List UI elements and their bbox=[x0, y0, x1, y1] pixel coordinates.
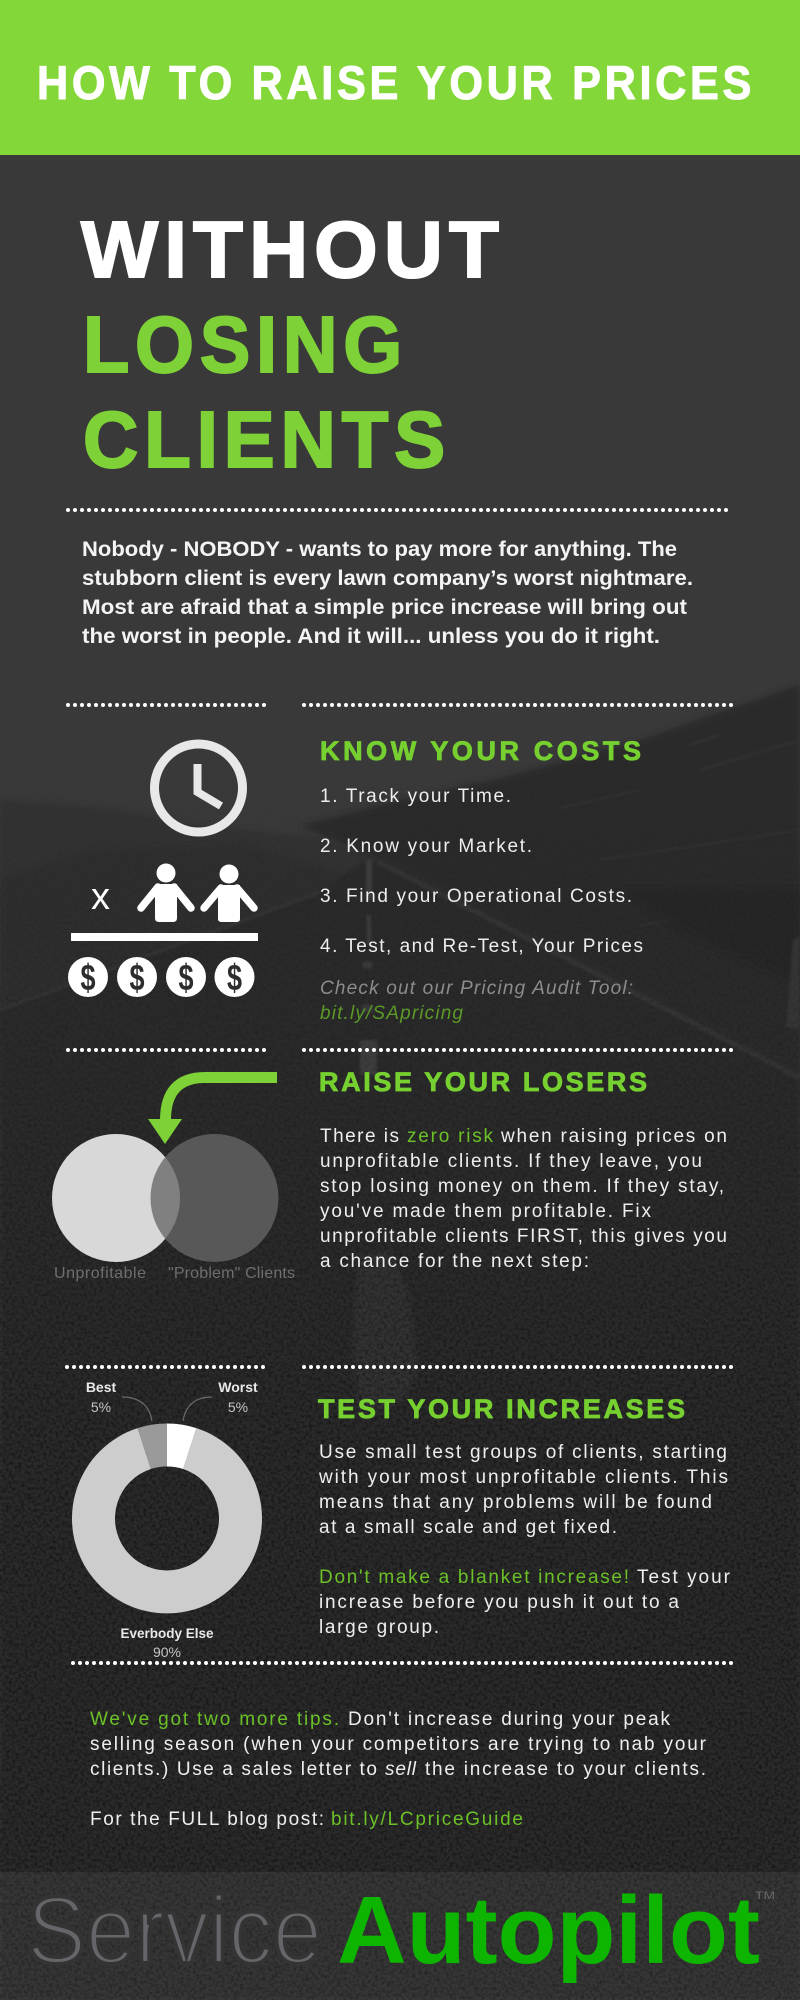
venn diagram bbox=[52, 1134, 295, 1282]
body text: Use small test groups of clients, starting bbox=[319, 1442, 727, 1463]
main title: LOSING bbox=[83, 300, 408, 389]
donut labels: Worst bbox=[218, 1379, 258, 1395]
body text: Test your bbox=[637, 1567, 731, 1588]
body text: a chance for the next step: bbox=[320, 1251, 589, 1272]
donut slice: everybody else bbox=[72, 1428, 262, 1613]
body text: when raising prices on bbox=[500, 1126, 727, 1147]
icon: dollar coins: $ bbox=[227, 957, 242, 998]
icon: clock bbox=[154, 744, 242, 832]
closing tips text: We've got two more tips. bbox=[90, 1709, 339, 1730]
main title: WITHOUT bbox=[81, 205, 505, 294]
closing tips text: For the FULL blog post: bbox=[90, 1809, 324, 1830]
donut labels: Everbody Else bbox=[120, 1626, 214, 1641]
icon: dollar coins: $ bbox=[130, 957, 145, 998]
body text: unprofitable clients FIRST, this gives you bbox=[320, 1226, 727, 1247]
heading: know your costs: KNOW YOUR COSTS bbox=[320, 736, 641, 766]
pricing audit tool link: bit.ly/SApricing bbox=[320, 1003, 463, 1024]
pricing audit tool link bbox=[320, 978, 633, 1024]
background: road photo bbox=[0, 686, 800, 2000]
body text: at a small scale and get fixed. bbox=[319, 1517, 617, 1538]
logo: Service Autopilot bbox=[27, 1877, 775, 1984]
body text bbox=[320, 1126, 727, 1272]
donut labels bbox=[86, 1379, 258, 1660]
intro text bbox=[82, 538, 693, 648]
donut labels: 5% bbox=[228, 1399, 248, 1415]
donut chart bbox=[72, 1379, 262, 1660]
list of steps: 1. Track your Time. bbox=[320, 786, 511, 807]
icon: two people bbox=[141, 864, 254, 922]
donut slice: best bbox=[138, 1423, 167, 1469]
closing tips text: the increase to your clients. bbox=[425, 1759, 706, 1780]
list of steps: 2. Know your Market. bbox=[320, 836, 532, 857]
list of steps: 4. Test, and Re-Test, Your Prices bbox=[320, 936, 643, 957]
header title: HOW TO RAISE YOUR PRICES bbox=[37, 56, 755, 109]
body text: unprofitable clients. If they leave, you bbox=[320, 1151, 702, 1172]
donut labels: 90% bbox=[153, 1644, 181, 1660]
main title bbox=[81, 205, 505, 484]
body text: with your most unprofitable clients. This bbox=[318, 1467, 728, 1488]
intro text: stubborn client is every lawn company’s worst nightmare. bbox=[82, 567, 693, 590]
list of steps bbox=[320, 786, 643, 957]
donut labels: 5% bbox=[91, 1399, 111, 1415]
icon: dollar coins bbox=[68, 957, 254, 998]
panel: know your costs bbox=[320, 736, 643, 1024]
closing tips text: clients.) Use a sales letter to bbox=[90, 1759, 377, 1780]
main title: CLIENTS bbox=[83, 395, 451, 484]
body text: There is bbox=[320, 1126, 399, 1147]
closing tips text bbox=[90, 1709, 707, 1830]
header band bbox=[0, 0, 800, 155]
intro text: the worst in people. And it will... unless you do it right. bbox=[82, 625, 660, 648]
body text bbox=[318, 1442, 731, 1638]
body text: large group. bbox=[319, 1617, 439, 1638]
multiply sign: x bbox=[91, 876, 110, 918]
icon: clock times people equals dollars bbox=[68, 744, 258, 998]
arrow: green curved arrow bbox=[148, 1078, 277, 1144]
heading: test your increases: TEST YOUR INCREASES bbox=[318, 1394, 685, 1424]
donut slice: worst bbox=[167, 1423, 196, 1469]
intro text: Nobody - NOBODY - wants to pay more for anything. The bbox=[82, 538, 677, 561]
list of steps: 3. Find your Operational Costs. bbox=[320, 886, 632, 907]
body text: means that any problems will be found bbox=[319, 1492, 712, 1513]
body text: you've made them profitable. Fix bbox=[320, 1201, 652, 1222]
closing tips text: Don't increase during your peak bbox=[348, 1709, 670, 1730]
body text: stop losing money on them. If they stay, bbox=[320, 1176, 724, 1197]
donut labels: Best bbox=[86, 1379, 117, 1395]
pricing audit tool link: Check out our Pricing Audit Tool: bbox=[320, 978, 633, 999]
icon: dollar coins: $ bbox=[80, 957, 96, 998]
closing tips text: sell bbox=[385, 1759, 417, 1780]
body text: zero risk bbox=[407, 1126, 494, 1147]
logo: Service Autopilot: TM bbox=[755, 1890, 775, 1902]
logo: Service Autopilot: Autopilot bbox=[337, 1877, 760, 1984]
intro text: Most are afraid that a simple price increase will bring out bbox=[82, 596, 687, 619]
body text: Don't make a blanket increase! bbox=[319, 1567, 629, 1588]
venn label: unprofitable: Unprofitable bbox=[54, 1265, 146, 1282]
closing tips text: selling season (when your competitors are trying to nab your bbox=[90, 1734, 707, 1755]
icon: dollar coins: $ bbox=[178, 957, 194, 998]
logo: Service Autopilot: Service bbox=[27, 1877, 322, 1984]
heading: raise your losers: RAISE YOUR LOSERS bbox=[319, 1067, 647, 1097]
panel: test your increases bbox=[318, 1394, 731, 1638]
closing tips text: bit.ly/LCpriceGuide bbox=[331, 1809, 523, 1830]
venn label: problem clients: "Problem" Clients bbox=[168, 1265, 295, 1282]
divider bar bbox=[71, 933, 258, 941]
panel: raise your losers bbox=[319, 1067, 727, 1272]
body text: increase before you push it out to a bbox=[319, 1592, 679, 1613]
leader lines bbox=[122, 1397, 212, 1421]
